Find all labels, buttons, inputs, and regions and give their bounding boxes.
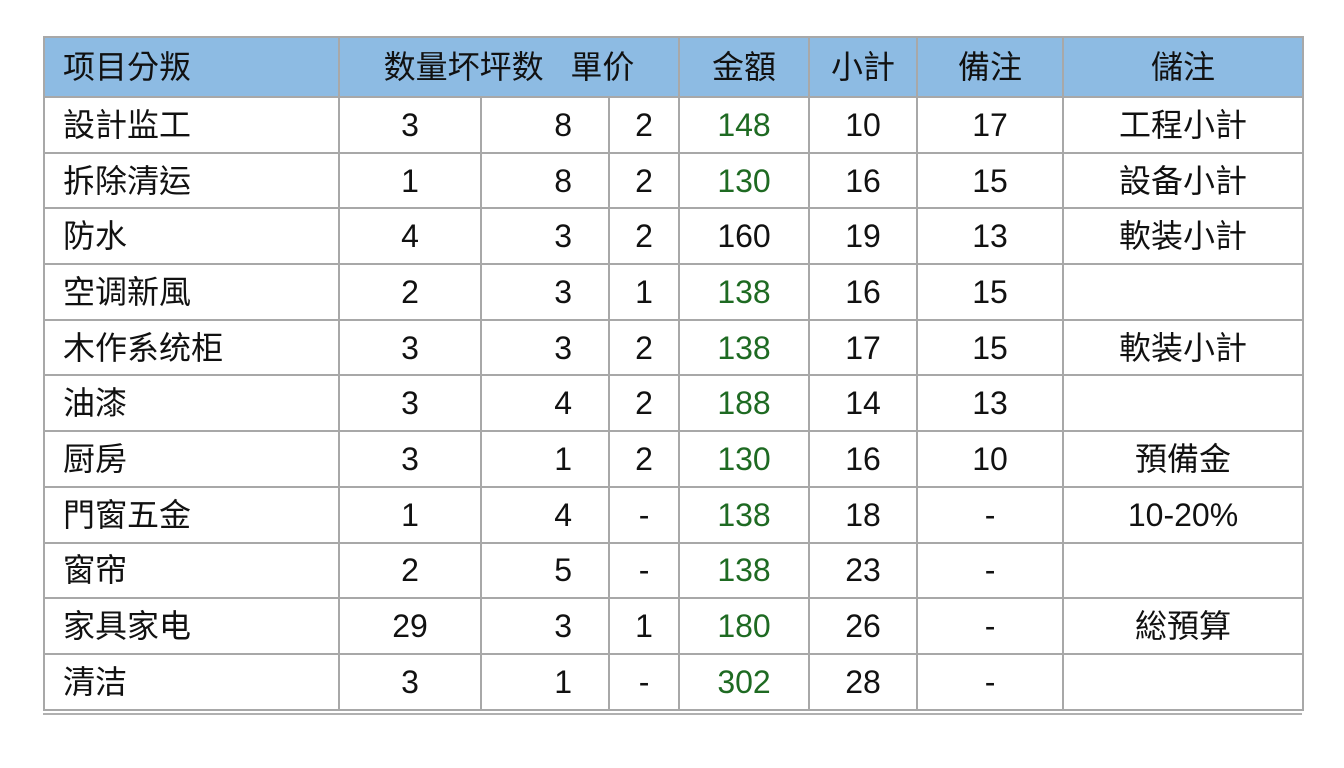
table: budget items: 148 [717, 107, 771, 143]
table: budget items: 3 [554, 274, 572, 310]
table: budget items: 1 [554, 664, 572, 700]
table: budget items: - [985, 497, 995, 533]
table: budget items: 工程小計 [1119, 107, 1247, 143]
table: budget items: 23 [845, 552, 881, 588]
table: budget items: 138 [717, 497, 771, 533]
table: budget items: 10 [972, 441, 1008, 477]
table: budget items: 4 [554, 497, 572, 533]
table: budget items: 13 [972, 385, 1008, 421]
table: budget items: 1 [554, 441, 572, 477]
table: budget items: 17 [845, 330, 881, 366]
table: budget items: - [639, 497, 649, 533]
table: budget items: - [985, 664, 995, 700]
table: budget items: 設計监工 [63, 107, 191, 143]
table: budget items: 3 [554, 330, 572, 366]
table: budget items: 油漆 [63, 385, 127, 421]
table: budget items: 清洁 [63, 664, 127, 700]
table: budget items: 2 [635, 441, 653, 477]
table: budget items: 180 [717, 608, 771, 644]
table: budget items: 3 [554, 608, 572, 644]
table: budget items: 138 [717, 552, 771, 588]
table: budget items: 1 [635, 274, 653, 310]
table: budget items: - [639, 664, 649, 700]
table: budget items: 15 [972, 330, 1008, 366]
table: budget items: 小計 [831, 49, 895, 85]
table: budget items: - [639, 552, 649, 588]
table: budget items: 3 [554, 218, 572, 254]
table: budget items: 15 [972, 163, 1008, 199]
table: budget items: 空调新風 [63, 274, 191, 310]
table: budget items: 160 [717, 218, 771, 254]
table: budget items: 16 [845, 163, 881, 199]
table: budget items: 設备小計 [1119, 163, 1247, 199]
table: budget items: 5 [554, 552, 572, 588]
table: budget items: 28 [845, 664, 881, 700]
table: budget items: 4 [554, 385, 572, 421]
table: budget items: 130 [717, 163, 771, 199]
table: budget items: 16 [845, 274, 881, 310]
table: budget items: 2 [635, 107, 653, 143]
table: budget items: 188 [717, 385, 771, 421]
table: budget items: 26 [845, 608, 881, 644]
table: budget items: - [985, 608, 995, 644]
table: budget items: 軟装小計 [1119, 330, 1247, 366]
table: budget items: 総預算 [1135, 608, 1231, 644]
table: budget items: 8 [554, 107, 572, 143]
table: budget items: 家具家电 [63, 608, 191, 644]
table: budget items: 2 [401, 552, 419, 588]
table: budget items: 厨房 [63, 441, 127, 477]
table: budget items: 防水 [63, 218, 127, 254]
table: budget items: 19 [845, 218, 881, 254]
table: budget items: 130 [717, 441, 771, 477]
table: budget items: 14 [845, 385, 881, 421]
table: budget items: 2 [635, 218, 653, 254]
table: budget items: 門窗五金 [63, 497, 191, 533]
table: budget items: 17 [972, 107, 1008, 143]
table: budget items: 1 [635, 608, 653, 644]
table: budget items: 10 [845, 107, 881, 143]
table: budget items: 13 [972, 218, 1008, 254]
table: budget items: 軟装小計 [1119, 218, 1247, 254]
table: budget items: 10-20% [1128, 497, 1238, 533]
table: budget items: 1 [401, 163, 419, 199]
table: budget items: 138 [717, 330, 771, 366]
table: budget items: 拆除清运 [63, 163, 191, 199]
table: budget items: 2 [635, 385, 653, 421]
table: budget items: 窗帘 [63, 552, 127, 588]
table: budget items: 3 [401, 107, 419, 143]
table: budget items: 302 [717, 664, 771, 700]
table: budget items: 项目分叛 [63, 49, 191, 85]
table: budget items: 金額 [712, 49, 776, 85]
table: budget items: 18 [845, 497, 881, 533]
table: budget items: 4 [401, 218, 419, 254]
table: budget items: - [985, 552, 995, 588]
table: budget items: 1 [401, 497, 419, 533]
table: budget items: 木作系统柜 [63, 330, 223, 366]
table: budget items: 16 [845, 441, 881, 477]
table: budget items: 3 [401, 385, 419, 421]
table: budget items: 3 [401, 441, 419, 477]
table: budget items: 備注 [958, 49, 1022, 85]
table: budget items: 儲注 [1151, 49, 1215, 85]
table: budget items: 数量坏坪数 單价 [384, 49, 634, 85]
table: budget items: 預備金 [1135, 441, 1231, 477]
table: budget items: 15 [972, 274, 1008, 310]
table: budget items: 8 [554, 163, 572, 199]
table: budget items: 29 [392, 608, 428, 644]
table: budget items: 2 [635, 163, 653, 199]
table: budget items: 138 [717, 274, 771, 310]
table: budget items: 3 [401, 330, 419, 366]
table: budget items: 2 [635, 330, 653, 366]
table: budget items: 3 [401, 664, 419, 700]
table: budget items: 2 [401, 274, 419, 310]
